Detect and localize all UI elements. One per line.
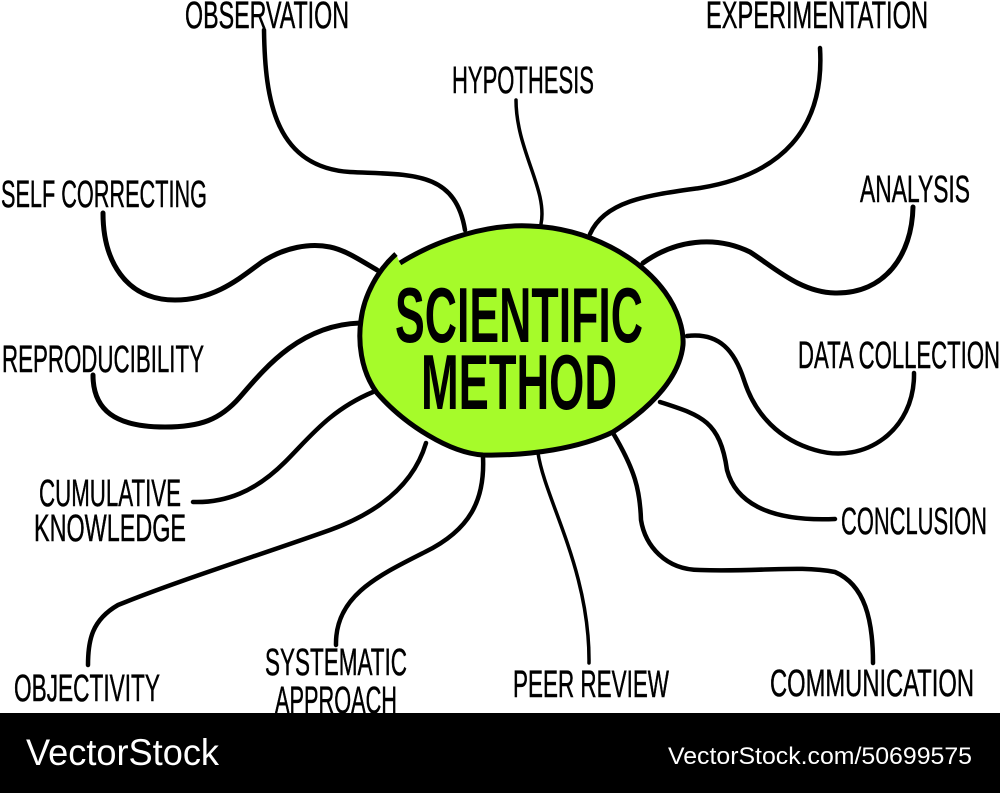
label: Objectivity: OBJECTIVITY (14, 668, 160, 710)
label: Reproducibility: REPRODUCIBILITY (2, 339, 204, 381)
footer bar: VectorStock (26, 732, 219, 773)
footer bar (0, 713, 1000, 793)
label: Cumulative knowledge: KNOWLEDGE (34, 508, 186, 550)
connector lines (88, 30, 914, 665)
footer bar: VectorStock.com/50699575 (668, 743, 972, 770)
label: Cumulative knowledge (34, 473, 186, 550)
central node: Scientific Method: SCIENTIFIC (395, 271, 643, 359)
label: Peer review: PEER REVIEW (513, 664, 669, 706)
central node: Scientific Method (360, 226, 683, 455)
label: Systematic approach (265, 642, 407, 722)
label: Cumulative knowledge: CUMULATIVE (39, 473, 181, 515)
label: Hypothesis: HYPOTHESIS (452, 60, 594, 102)
label: Systematic approach: SYSTEMATIC (265, 642, 407, 684)
label: Systematic approach: APPROACH (275, 680, 397, 722)
central node: Scientific Method: METHOD (421, 338, 617, 426)
label: Self correcting: SELF CORRECTING (1, 174, 207, 216)
